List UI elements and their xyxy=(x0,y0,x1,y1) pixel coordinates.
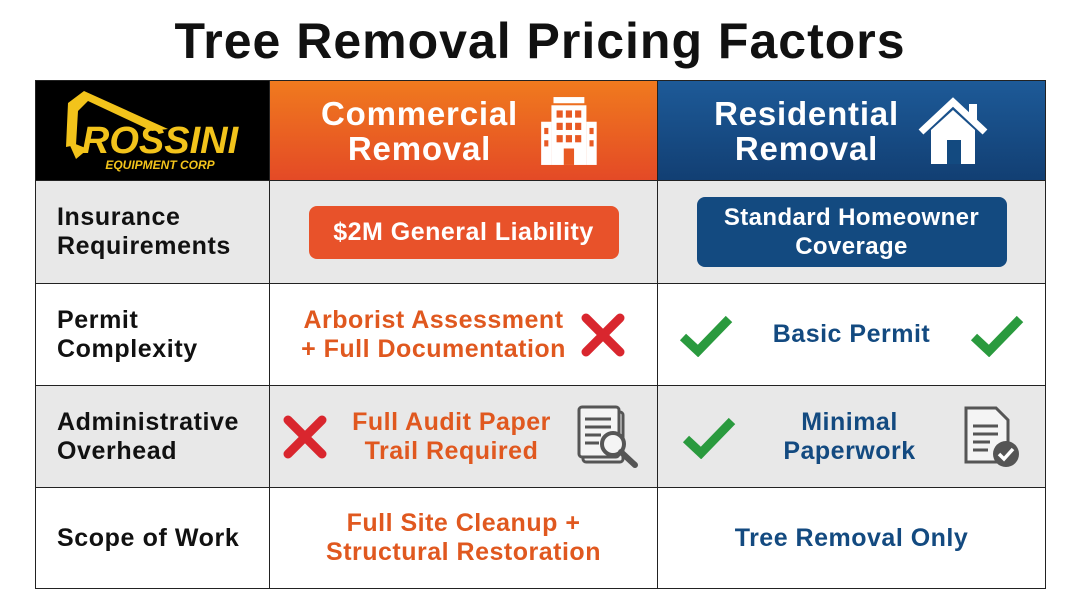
row: permit xyxy=(35,283,270,386)
icon: check xyxy=(683,418,736,459)
row: admin: Overhead xyxy=(57,436,177,464)
icon: check xyxy=(680,316,732,357)
badge: standard coverage: Standard Homeowner xyxy=(724,204,979,231)
header: commercial: Removal xyxy=(348,130,491,166)
icon: document check xyxy=(964,406,1019,467)
row: insurance xyxy=(35,180,270,284)
logo cell: EQUIPMENT CORP xyxy=(105,158,215,172)
badge: $2M: $2M General Liability xyxy=(333,218,594,246)
header: commercial: Commercial xyxy=(321,94,518,132)
icon: building xyxy=(541,97,597,165)
badge: standard coverage xyxy=(696,197,1006,267)
header: residential: Removal xyxy=(735,130,878,166)
table: Full Site Cleanup + xyxy=(347,509,580,537)
logo cell xyxy=(35,80,270,181)
row: admin xyxy=(35,385,270,488)
row: permit: Permit xyxy=(57,306,138,334)
row: admin: Administrative xyxy=(57,408,239,436)
title: Tree Removal Pricing Factors xyxy=(174,13,906,69)
table: Paperwork xyxy=(783,436,916,464)
icon: red x xyxy=(284,416,326,458)
table: Full Audit Paper xyxy=(352,408,551,436)
header: residential: Residential xyxy=(714,94,899,132)
row: scope: Scope of Work xyxy=(57,524,239,552)
table: Trail Required xyxy=(365,436,538,464)
table: Tree Removal Only xyxy=(735,524,968,552)
icon: red x xyxy=(582,314,624,356)
table xyxy=(35,80,1046,589)
table: Minimal xyxy=(801,408,898,436)
badge: $2M xyxy=(308,206,618,258)
row: scope xyxy=(35,487,270,589)
header: residential xyxy=(657,80,1046,181)
row: permit: Complexity xyxy=(57,334,198,362)
table: Structural Restoration xyxy=(326,538,601,566)
icon: house xyxy=(918,97,988,164)
badge: standard coverage: Coverage xyxy=(795,233,908,260)
row: insurance: Requirements xyxy=(57,232,231,260)
header: commercial xyxy=(269,80,658,181)
table: Basic Permit xyxy=(773,320,930,348)
icon: document search xyxy=(578,406,638,468)
table: Arborist Assessment xyxy=(303,306,564,334)
row: insurance: Insurance xyxy=(57,203,181,231)
icon: check xyxy=(971,316,1024,357)
logo cell: ROSSINI xyxy=(81,120,239,162)
table: + Full Documentation xyxy=(301,334,566,362)
